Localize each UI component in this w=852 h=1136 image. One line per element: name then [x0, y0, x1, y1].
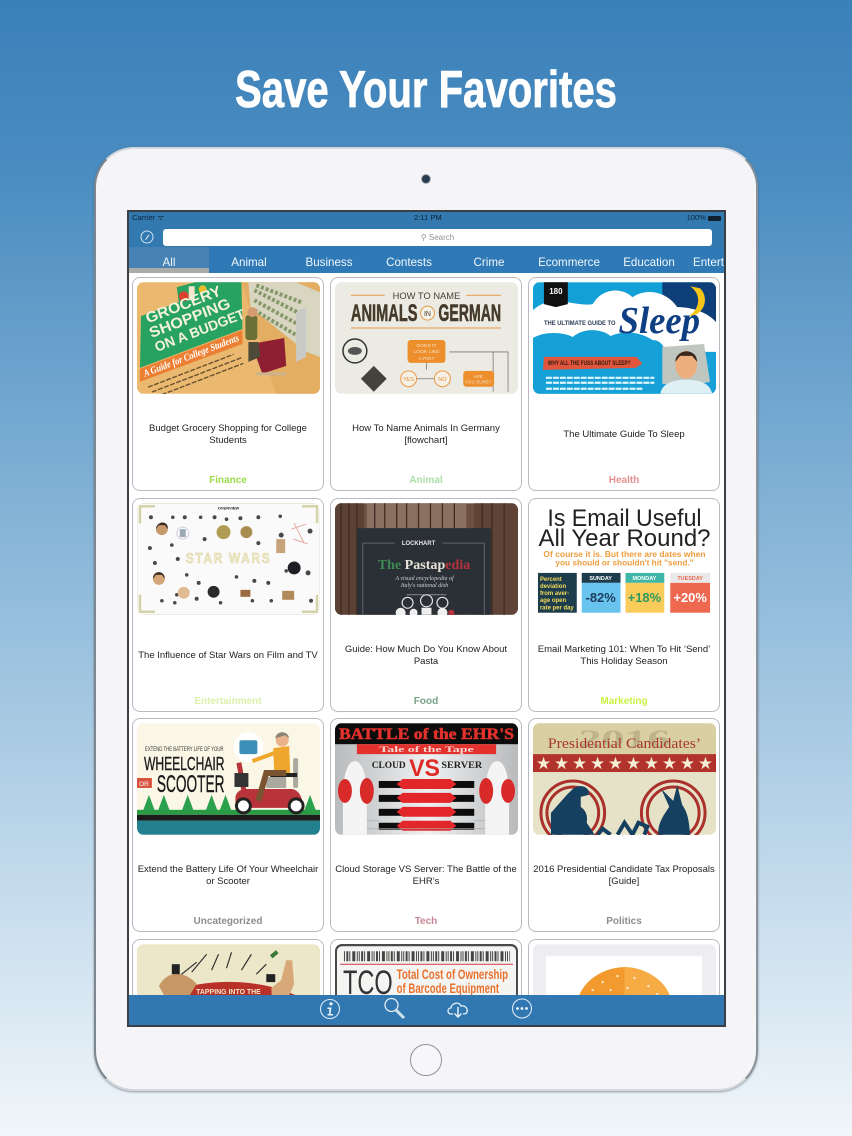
search bar: ⚲ Search — [421, 233, 454, 242]
card title: The Influence of Star Wars on Film and TV — [138, 650, 318, 661]
thumbnail: EHR battle: CLOUD — [371, 760, 405, 771]
card: guide to sleep — [528, 277, 720, 491]
selected tab — [129, 247, 209, 273]
thumbnail: email: Is Email Useful — [547, 505, 701, 532]
card title: The Ultimate Guide To Sleep — [563, 429, 685, 440]
category label: Uncategorized — [194, 916, 262, 927]
thumbnail: sleep: 180 — [549, 287, 563, 296]
thumbnail: animals in german: NO — [438, 377, 446, 383]
status bar — [129, 212, 724, 247]
card title: Extend the Battery Life Of Your Wheelchair or Scooter — [138, 864, 318, 887]
tab: Crime: Crime — [474, 256, 504, 269]
thumbnail: burger — [533, 944, 716, 995]
card: EHR — [330, 718, 522, 932]
thumbnail: email: from aver- — [539, 591, 569, 597]
front camera — [421, 174, 431, 184]
category label: Tech — [415, 916, 437, 927]
tab: Business: Business — [305, 256, 353, 269]
card title: 2016 Presidential Candidate Tax Proposals [Guide] — [533, 864, 715, 887]
thumbnail: sleep — [533, 282, 716, 394]
status bar: Carrier ᯤ — [132, 213, 164, 222]
thumbnail: mapping illustration — [137, 944, 320, 996]
thumbnail: sleep: THE ULTIMATE GUIDE TO — [543, 321, 615, 327]
thumbnail: email: TUESDAY — [677, 576, 703, 582]
icon: cloud download — [447, 1002, 468, 1018]
card title: Budget Grocery Shopping for College Students — [149, 423, 307, 446]
partial card: fourth row middle — [330, 939, 522, 1009]
thumbnail: candidates: ★★★★★★★★★★ — [535, 753, 713, 773]
thumbnail: TCO barcode — [335, 944, 518, 1002]
tab: Education: Education — [623, 256, 675, 269]
category label: Animal — [409, 475, 443, 486]
thumbnail: sleep: WHY ALL THE FUSS ABOUT SLEEP? — [547, 361, 630, 367]
thumbnail: wheelchair: SCOOTER — [156, 771, 224, 798]
card: presidential — [528, 718, 720, 932]
thumbnail: EHR battle: SERVER — [441, 760, 483, 771]
thumbnail: EHR battle — [335, 723, 518, 835]
thumbnail: candidates: Presidential Candidates’ — [547, 736, 701, 752]
thumbnail: animals in german: ARE — [473, 374, 482, 379]
thumbnail: grocery: GROCERY — [143, 284, 223, 327]
search bar — [163, 229, 712, 246]
card: email marketing — [528, 498, 720, 712]
thumbnail: email: age open — [539, 598, 566, 604]
category label: Food — [414, 696, 438, 707]
thumbnail: pastapedia: LOCKHART — [401, 541, 435, 547]
thumbnail: animals in german: YOU SURE? — [465, 380, 491, 385]
thumbnail: email: +18% — [627, 590, 661, 605]
card: animals in german — [330, 277, 522, 491]
thumbnail: pastapedia — [335, 503, 518, 615]
card title: Cloud Storage VS Server: The Battle of the EHR’s — [335, 864, 517, 887]
card: grocery shopping — [132, 277, 324, 491]
home button — [410, 1044, 442, 1076]
card title: How To Name Animals In Germany [flowchart] — [352, 423, 500, 446]
thumbnail: animals in german: ANIMALS — [350, 300, 417, 327]
thumbnail: animals in german: HOW TO NAME — [392, 291, 460, 302]
thumbnail: email: Percent — [539, 577, 561, 583]
card: wheelchair — [132, 718, 324, 932]
thumbnail: grocery: ON A BUDGET — [152, 305, 247, 355]
thumbnail: grocery: SHOPPING — [147, 296, 232, 342]
category label: Politics — [606, 916, 642, 927]
thumbnail: star wars: STAR WARS — [185, 551, 271, 567]
card: star wars — [132, 498, 324, 712]
thumbnail: candidates — [533, 723, 716, 835]
thumbnail: animals in german: DOES IT — [416, 343, 436, 349]
tab: Ecommerce: Ecommerce — [538, 256, 600, 269]
thumbnail: grocery — [137, 282, 320, 394]
bottom toolbar — [129, 995, 724, 1025]
thumbnail: animals in german: LOOK LIKE — [413, 349, 440, 355]
thumbnail: wheelchair: OR — [139, 781, 149, 788]
thumbnail: email: deviation — [539, 584, 566, 590]
thumbnail: animals in german: A PIG? — [418, 356, 434, 362]
thumbnail: email: rate per day — [539, 606, 574, 612]
icon: search — [384, 998, 405, 1019]
thumbnail: email: -82% — [585, 590, 616, 605]
card title: Email Marketing 101: When To Hit ‘Send’ This Holiday Season — [538, 644, 710, 667]
compose icon — [140, 230, 154, 244]
partial card: fourth row left — [132, 939, 324, 1009]
tab: Animal: Animal — [231, 256, 267, 269]
category tabs bar — [129, 247, 724, 273]
thumbnail: animals in german — [335, 282, 518, 394]
card: pasta — [330, 498, 522, 712]
thumbnail: EHR battle: BATTLE of the EHR'S — [338, 726, 514, 743]
thumbnail: pastapedia: Italy's national dish — [399, 583, 448, 589]
thumbnail: wheelchair: WHEELCHAIR — [143, 754, 224, 775]
thumbnail: EHR battle: VS — [409, 755, 439, 782]
thumbnail: star wars — [137, 503, 320, 615]
icon: more — [512, 998, 532, 1018]
thumbnail: grocery: A Guide for College Students — [141, 333, 240, 380]
thumbnail: email: All Year Round? — [538, 525, 710, 552]
thumbnail: wheelchair: EXTEND THE BATTERY LIFE OF YOUR — [144, 746, 223, 753]
icon: info — [320, 999, 340, 1019]
category label: Marketing — [600, 696, 648, 707]
status bar: 2:11 PM — [414, 213, 442, 222]
partial card: fourth row right — [528, 939, 720, 1009]
status bar: 100% — [687, 213, 706, 222]
thumbnail: pastapedia: The Pastapedia — [377, 558, 470, 573]
thumbnail: TCO barcode: TCO — [342, 964, 392, 1002]
thumbnail: email — [538, 505, 710, 613]
thumbnail: email: +20% — [673, 590, 707, 605]
category label: Finance — [209, 475, 247, 486]
tablet screen — [127, 210, 726, 1027]
thumbnail: animals in german: IN — [424, 311, 430, 318]
thumbnail: wheelchair — [137, 723, 320, 835]
thumbnail: animals in german: YES — [403, 377, 414, 383]
thumbnail: email: Of course it is. But there are dates when — [543, 550, 705, 559]
thumbnail: email: you should or shouldn't hit "send." — [555, 558, 693, 567]
thumbnail: star wars: OVERVIEW — [217, 505, 239, 510]
category label: Entertainment — [194, 696, 262, 707]
thumbnail: email: MONDAY — [632, 576, 656, 582]
tab: Contests: Contests — [386, 256, 432, 269]
tablet device frame — [94, 147, 758, 1091]
thumbnail: sleep: Sleep — [618, 300, 700, 342]
thumbnail: EHR battle: Tale of the Tape — [379, 744, 474, 754]
thumbnail: mapping illustration: TAPPING INTO THE — [196, 989, 261, 996]
tab: All: All — [163, 256, 175, 269]
card title: Guide: How Much Do You Know About Pasta — [345, 644, 507, 667]
thumbnail: email: SUNDAY — [589, 576, 612, 582]
thumbnail: candidates: 2016 — [578, 724, 670, 753]
thumbnail: pastapedia: A visual encyclopedia of — [394, 575, 454, 582]
category label: Health — [609, 475, 639, 486]
